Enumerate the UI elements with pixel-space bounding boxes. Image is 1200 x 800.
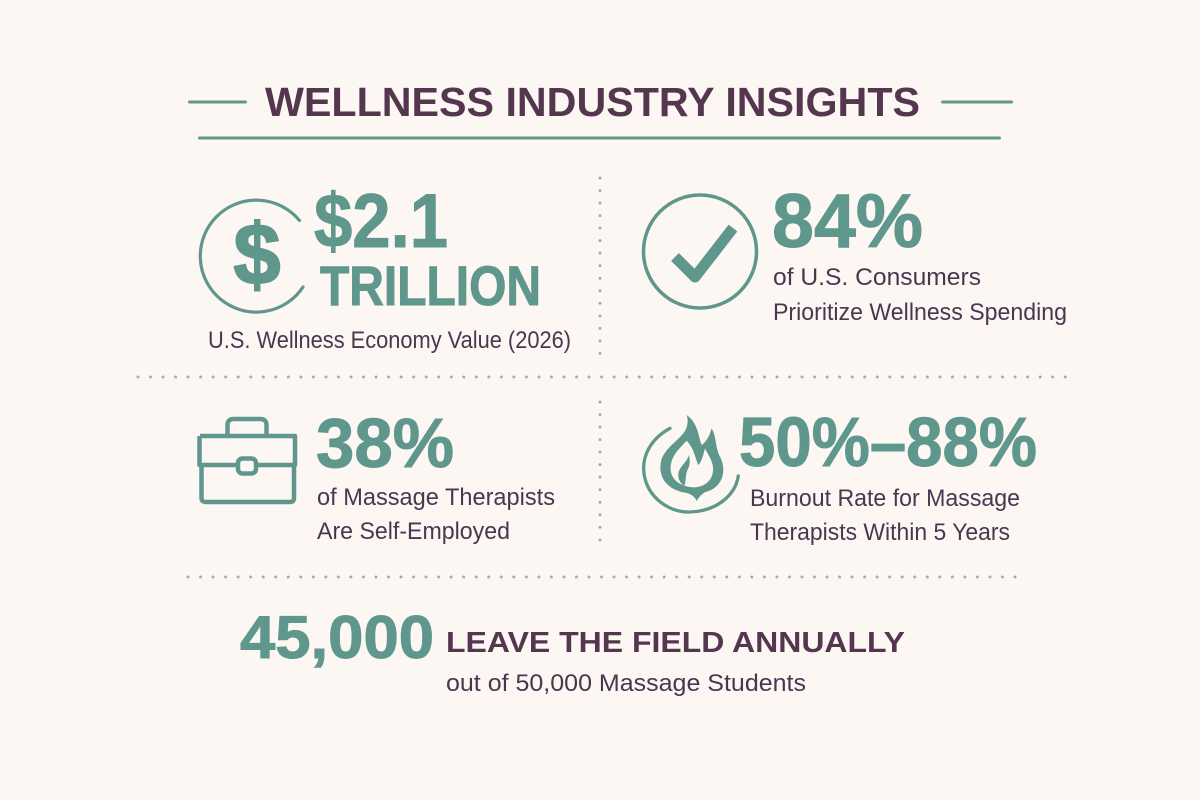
icon: briefcase (200, 419, 295, 502)
stat: 84%: 84% (772, 179, 923, 264)
caption: self-employed: of Massage Therapists (317, 484, 555, 511)
caption: burnout: Therapists Within 5 Years (750, 519, 1010, 546)
stat: $2.1 trillion (314, 179, 541, 317)
caption: consumers: of U.S. Consumers (773, 264, 981, 291)
heading: leave the field annually: LEAVE THE FIELD ANNUALLY (446, 627, 905, 659)
caption: self-employed: Are Self-Employed (317, 518, 510, 545)
stat: $2.1 trillion: TRILLION (320, 254, 541, 317)
panel: burnout rate (644, 403, 1037, 546)
title (188, 79, 1013, 140)
caption: consumers: Prioritize Wellness Spending (773, 299, 1067, 326)
caption: burnout: Burnout Rate for Massage (750, 485, 1020, 512)
icon: dollar in open circle (200, 200, 303, 312)
panel: self-employed therapists (200, 404, 555, 545)
icon: flame in open circle (644, 415, 738, 512)
panel: consumers prioritize wellness (644, 179, 1067, 326)
stat: 50%-88%: 50%–88% (739, 403, 1037, 481)
title: WELLNESS INDUSTRY INSIGHTS (265, 79, 920, 125)
panel: wellness economy value (200, 179, 571, 354)
caption: consumers (773, 264, 1067, 326)
stat: 45,000: 45,000 (240, 604, 434, 671)
caption: burnout (750, 485, 1020, 546)
panel: leaving the field (240, 604, 905, 697)
stat: 38%: 38% (316, 404, 454, 482)
caption: self-employed (317, 484, 555, 545)
caption: massage students: out of 50,000 Massage Students (446, 670, 806, 697)
stat: $2.1 trillion: $2.1 (314, 179, 448, 264)
icon: check mark in circle (644, 195, 756, 308)
caption: economy value: U.S. Wellness Economy Value (2026) (208, 327, 571, 354)
icon: dollar in open circle: $ (234, 207, 280, 303)
